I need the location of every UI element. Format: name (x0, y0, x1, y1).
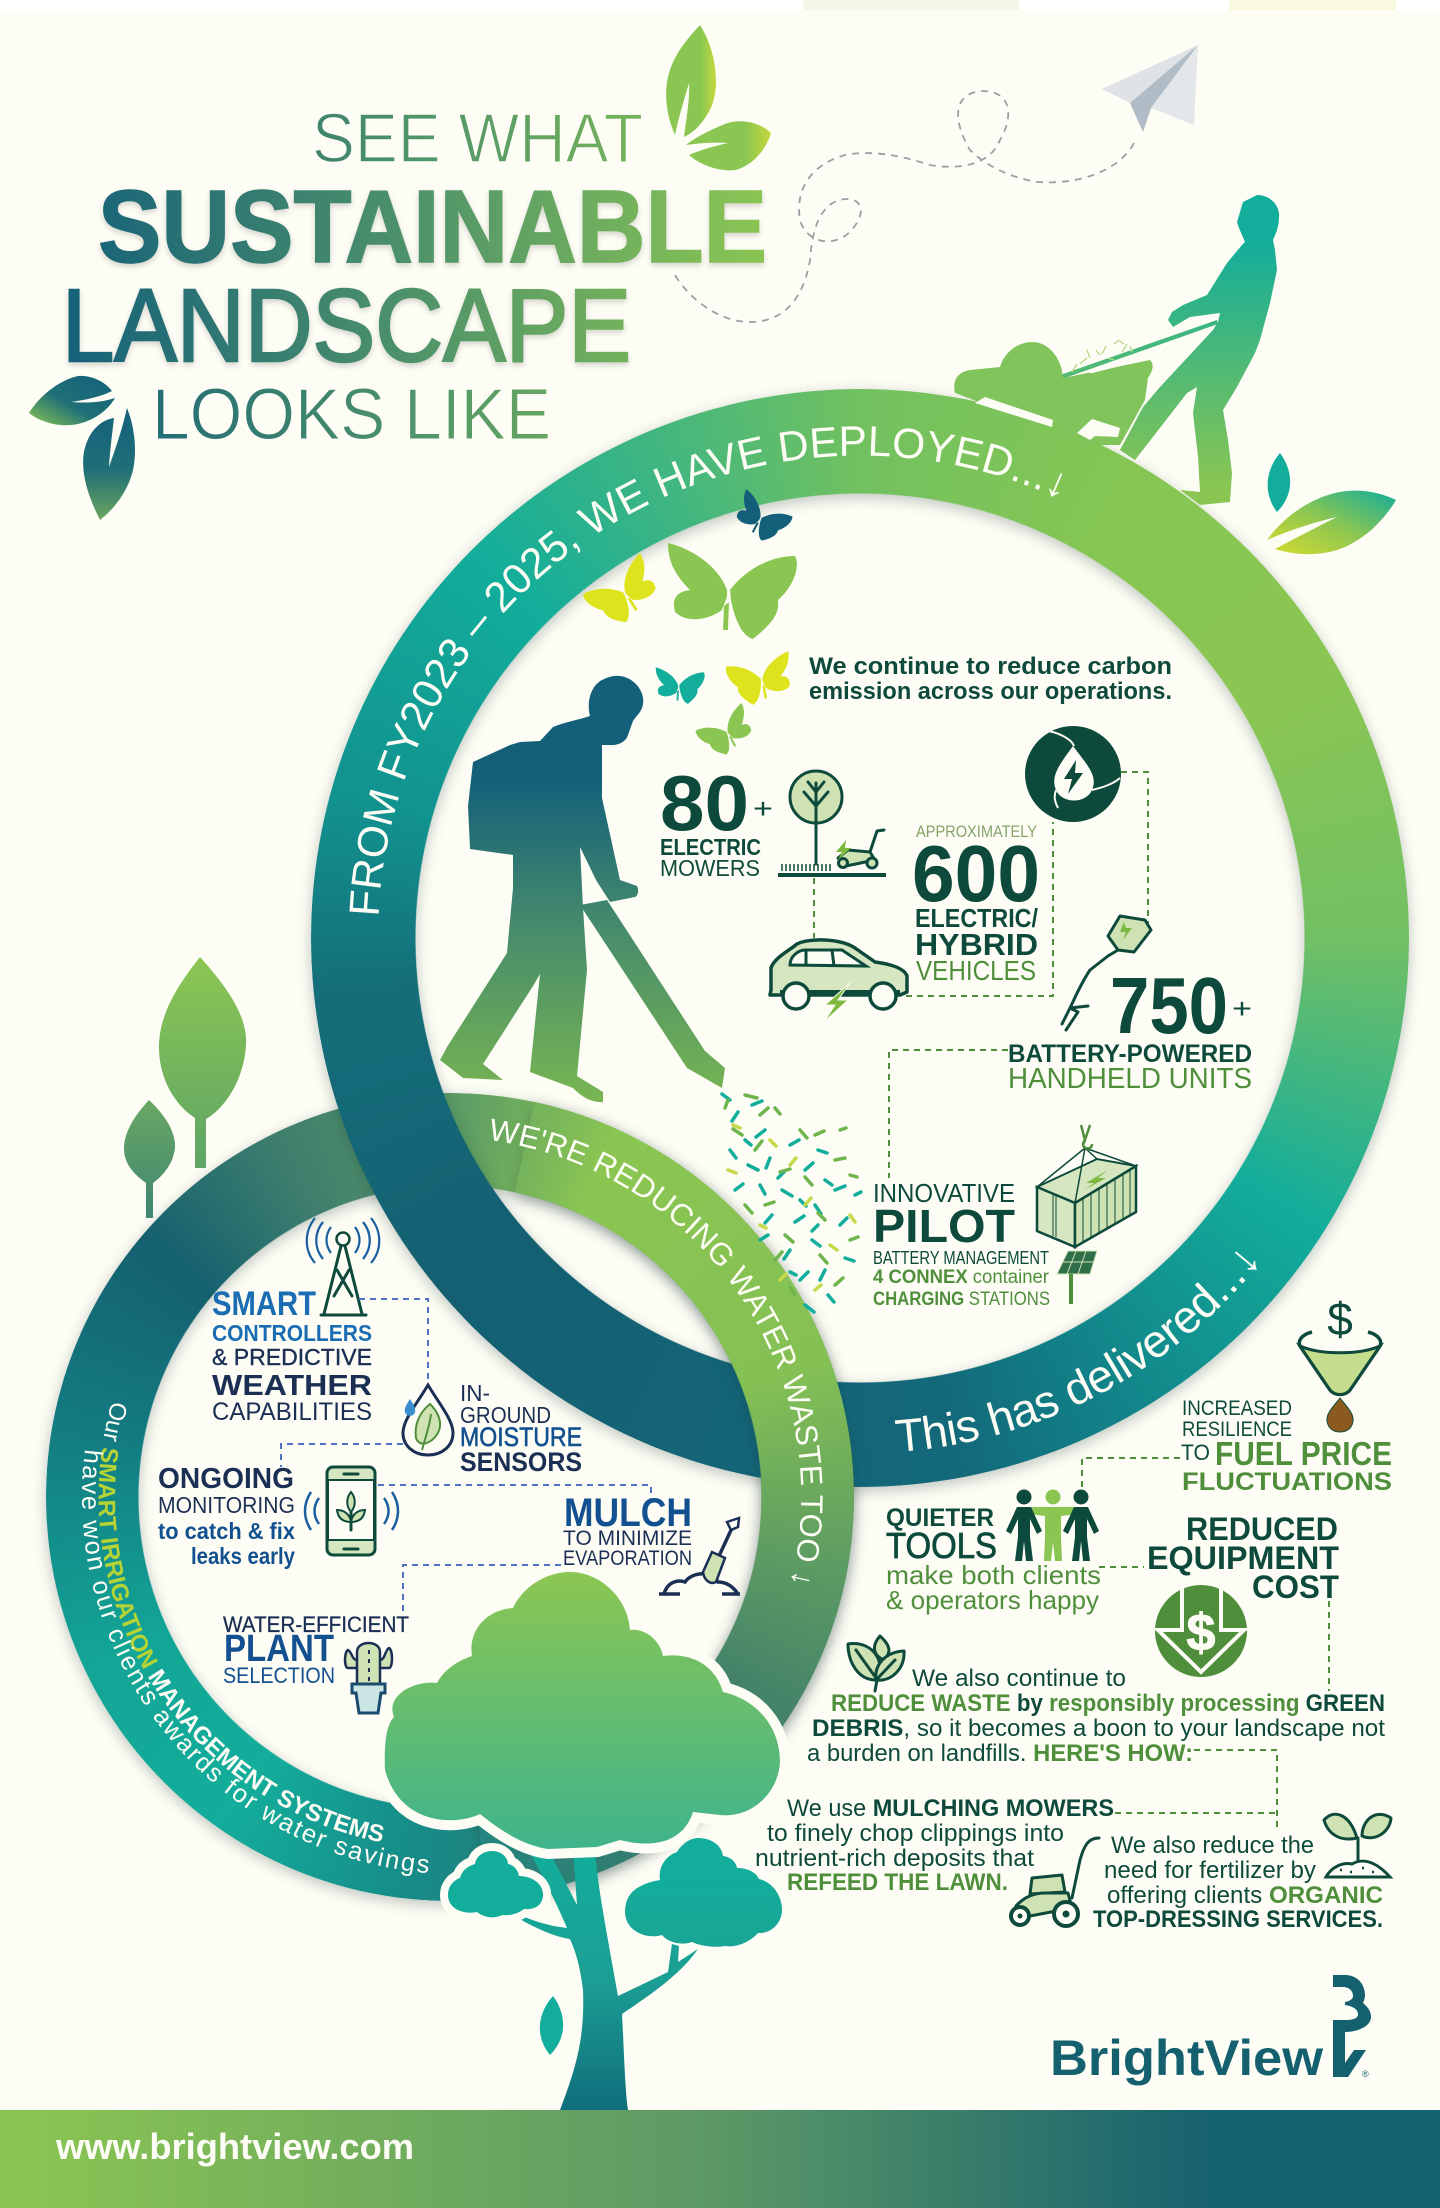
dashed flight path (675, 91, 1134, 322)
icon: paper plane (1102, 45, 1198, 132)
stat: 750+ battery units: + (1232, 993, 1252, 1024)
icon: fuel funnel (1299, 1293, 1381, 1432)
text: ongoing monitoring (158, 1463, 295, 1569)
icon: tree and electric mower (778, 771, 886, 875)
connector: fuel to tools (1082, 1458, 1180, 1488)
stat: approximately 600 vehicles: ELECTRIC/ (915, 903, 1038, 933)
logo: BrightView: ® (1362, 2069, 1369, 2079)
stat: 750+ battery units: BATTERY-POWERED (1008, 1040, 1252, 1068)
small ring: segment passing over big ring (475, 1101, 862, 1900)
top strip (0, 0, 1440, 10)
stat: 80+ electric mowers: MOWERS (660, 855, 760, 881)
footer band: www.brightview.com (55, 2126, 414, 2167)
benefit: reduced equipment cost: REDUCED (1186, 1511, 1338, 1547)
icon: lower title leaves (29, 376, 135, 520)
benefit: reduced equipment cost (1147, 1511, 1339, 1605)
text: reduce waste: a burden on landfills. HERE'S HOW: (807, 1740, 1193, 1767)
text: mulch: EVAPORATION (563, 1547, 692, 1570)
connector: phone to mulch (378, 1485, 651, 1500)
ring text: this has delivered: This has delivered...↓ (894, 1251, 1257, 1451)
stat: approximately 600 vehicles: HYBRID (915, 927, 1038, 962)
stat: innovative pilot: CHARGING STATIONS (873, 1289, 1050, 1310)
text: water-efficient plant: WATER-EFFICIENT (223, 1612, 409, 1637)
icon: battery trimmer (1062, 916, 1151, 1030)
text: ongoing monitoring: leaks early (191, 1543, 295, 1569)
benefit: quieter tools: TOOLS (886, 1525, 997, 1566)
connector: handheld to pilot (889, 1050, 1008, 1178)
text: smart controllers: SMART (212, 1285, 316, 1323)
logo: BrightView (1050, 1975, 1371, 2086)
text: reduce waste: We also continue to (912, 1665, 1126, 1692)
text: smart controllers: CONTROLLERS (212, 1320, 372, 1346)
text: water-efficient plant: PLANT (224, 1628, 334, 1670)
stat: innovative pilot: INNOVATIVE (873, 1178, 1015, 1208)
icon: solar panel (1057, 1251, 1097, 1304)
text: ongoing monitoring: to catch & fix (158, 1518, 295, 1544)
text: organic top-dressing (1093, 1832, 1383, 1933)
benefit: reduced equipment cost: EQUIPMENT (1147, 1540, 1339, 1576)
connector: car to charger (906, 822, 1053, 996)
icon: top leaves (666, 25, 771, 170)
ring text: water waste: WE'RE REDUCING WATER WASTE TOO ↓ (492, 1118, 823, 1582)
text: mulching mowers: nutrient-rich deposits that (755, 1845, 1034, 1872)
icon: sprout in soil (1324, 1814, 1391, 1877)
stat: approximately 600 vehicles (912, 822, 1040, 986)
text: mulching mowers (755, 1795, 1114, 1896)
silhouette: man with mower (954, 195, 1279, 505)
text: smart controllers (212, 1285, 372, 1426)
ring text: smart irrigation: Our SMART IRRIGATION MANAGEMENT SYSTEMS (98, 1404, 384, 1842)
icon: fuel funnel: $ (1327, 1293, 1353, 1345)
icon: leaves (848, 1636, 904, 1691)
stat: innovative pilot: 4 CONNEX container (873, 1267, 1050, 1288)
text: ongoing monitoring: ONGOING (158, 1463, 294, 1495)
icon: yellow butterfly left (579, 553, 666, 634)
benefit: fuel price resilience: TO (1181, 1440, 1210, 1465)
connector: here's how (1115, 1750, 1277, 1831)
text: moisture sensors: SENSORS (460, 1447, 582, 1477)
connector: charger to trimmer (1121, 772, 1148, 923)
icon: dollar down arrow (1155, 1585, 1247, 1677)
icon: right leaves (1267, 453, 1396, 554)
icon: phone with plant (305, 1467, 398, 1555)
text: organic top-dressing: We also reduce the (1111, 1832, 1314, 1859)
logo: BrightView: BrightView (1050, 2030, 1323, 2086)
silhouette: leaf blower operator (440, 676, 725, 1102)
stat: approximately 600 vehicles: 600 (912, 829, 1040, 918)
benefit: fuel price resilience: RESILIENCE (1182, 1418, 1292, 1441)
title: LANDSCAPE (62, 268, 631, 383)
text: water-efficient plant (223, 1612, 409, 1688)
text: smart controllers: CAPABILITIES (212, 1398, 372, 1426)
leaf spray (722, 1094, 861, 1312)
stat: 80+ electric mowers: ELECTRIC (660, 834, 761, 860)
stat: innovative pilot (873, 1178, 1050, 1310)
text: mulch: TO MINIMIZE (563, 1527, 692, 1550)
text: mulch: MULCH (564, 1491, 692, 1535)
benefit: quieter tools: QUIETER (886, 1504, 994, 1532)
text: organic top-dressing: TOP-DRESSING SERVICES. (1093, 1906, 1383, 1933)
benefit: fuel price resilience: FLUCTUATIONS (1182, 1468, 1392, 1496)
mower ground gaps (975, 397, 1120, 440)
text: ongoing monitoring: MONITORING (158, 1492, 295, 1518)
stat: 80+ electric mowers (660, 759, 773, 881)
icon: electric car (770, 940, 907, 1022)
benefit: quieter tools: make both clients (886, 1560, 1101, 1590)
icon: push mower (1011, 1838, 1099, 1926)
text: reduce waste: DEBRIS, so it becomes a boon to your landscape not (812, 1715, 1385, 1742)
benefit: quieter tools (886, 1504, 1101, 1615)
small ring: water band (lower layer) (38, 1090, 862, 1912)
intro text: carbon emission: We continue to reduce carbon (809, 653, 1172, 680)
tree: trunk and branches (518, 1844, 698, 2110)
tree: main crown (385, 1572, 780, 1849)
ring text: from FY2023: FROM FY2023 – 2025, WE HAVE DEPLOYED...↓ (349, 426, 1062, 914)
tree: right small crown (625, 1838, 782, 1947)
big ring: deployment band (304, 386, 1416, 1498)
benefit: quieter tools: & operators happy (886, 1585, 1099, 1615)
benefit: fuel price resilience (1181, 1397, 1392, 1496)
benefit: fuel price resilience: INCREASED (1182, 1397, 1292, 1420)
intro text: carbon emission (809, 653, 1172, 705)
text: organic top-dressing: offering clients ORGANIC (1107, 1882, 1383, 1909)
icon: dollar down arrow: $ (1187, 1604, 1216, 1662)
stat: innovative pilot: PILOT (873, 1200, 1015, 1252)
title: SUSTAINABLE (98, 169, 767, 284)
stat: 750+ battery units: 750 (1110, 961, 1228, 1050)
text: moisture sensors: IN- (460, 1380, 490, 1406)
text: mulch (563, 1491, 692, 1570)
icon: dark butterfly (729, 489, 795, 548)
text: smart controllers: WEATHER (212, 1370, 372, 1402)
text: reduce waste: REDUCE WASTE by responsibly processing GREEN (831, 1690, 1385, 1717)
icon: charging circle (1025, 726, 1121, 822)
stat: 750+ battery units: HANDHELD UNITS (1008, 1063, 1252, 1095)
text: moisture sensors: GROUND (460, 1402, 551, 1428)
connector: mulch to plant (403, 1565, 561, 1612)
text: mulching mowers: to finely chop clippings into (767, 1820, 1064, 1847)
icon: tower (307, 1218, 379, 1315)
text: organic top-dressing: need for fertilizer by (1104, 1857, 1316, 1884)
stat: 80+ electric mowers: + (753, 793, 773, 824)
text: water-efficient plant: SELECTION (223, 1663, 335, 1688)
benefit: reduced equipment cost: COST (1252, 1569, 1339, 1605)
icon: big green butterfly (668, 543, 797, 639)
connector: tower to sensor (359, 1299, 428, 1379)
tree: left small crown (448, 1851, 543, 1917)
connector: cost to waste (1328, 1601, 1330, 1691)
benefit: fuel price resilience: FUEL PRICE (1215, 1435, 1392, 1472)
icon: left background trees (124, 957, 246, 1218)
icon: small green butterfly (693, 703, 759, 762)
stat: 750+ battery units (1008, 961, 1252, 1095)
text: moisture sensors: MOISTURE (460, 1422, 582, 1452)
connector: mower to car (813, 878, 815, 938)
icon: falling leaf (540, 1996, 563, 2055)
icon: container on hook (1037, 1125, 1136, 1247)
ring text: client awards: have won our clients awards for water savings (82, 1450, 428, 1876)
stat: innovative pilot: BATTERY MANAGEMENT (873, 1248, 1049, 1268)
text: mulching mowers: We use MULCHING MOWERS (787, 1795, 1114, 1822)
text: moisture sensors (460, 1380, 582, 1477)
title (62, 99, 767, 455)
intro text: carbon emission: emission across our operations. (809, 678, 1172, 705)
icon: shovel in mulch (659, 1518, 740, 1594)
title: LOOKS LIKE (152, 375, 551, 455)
icon: yellow butterfly right (724, 651, 795, 708)
stat: approximately 600 vehicles: APPROXIMATELY (916, 822, 1037, 841)
title: SEE WHAT (312, 99, 643, 177)
icon: cactus (345, 1643, 392, 1713)
stat: 80+ electric mowers: 80 (660, 759, 749, 847)
icon: teal butterfly (656, 667, 705, 704)
footer band (0, 2110, 1440, 2208)
text: reduce waste (807, 1665, 1385, 1767)
connector: sensor to monitoring (281, 1444, 403, 1467)
connector: tools to equipment (1099, 1566, 1144, 1568)
stat: approximately 600 vehicles: VEHICLES (916, 955, 1036, 986)
icon: people (1006, 1490, 1099, 1561)
text: smart controllers: & PREDICTIVE (212, 1344, 372, 1370)
text: mulching mowers: REFEED THE LAWN. (787, 1869, 1008, 1896)
icon: moisture drop (403, 1385, 453, 1455)
grass clippings in mower (1072, 340, 1138, 372)
